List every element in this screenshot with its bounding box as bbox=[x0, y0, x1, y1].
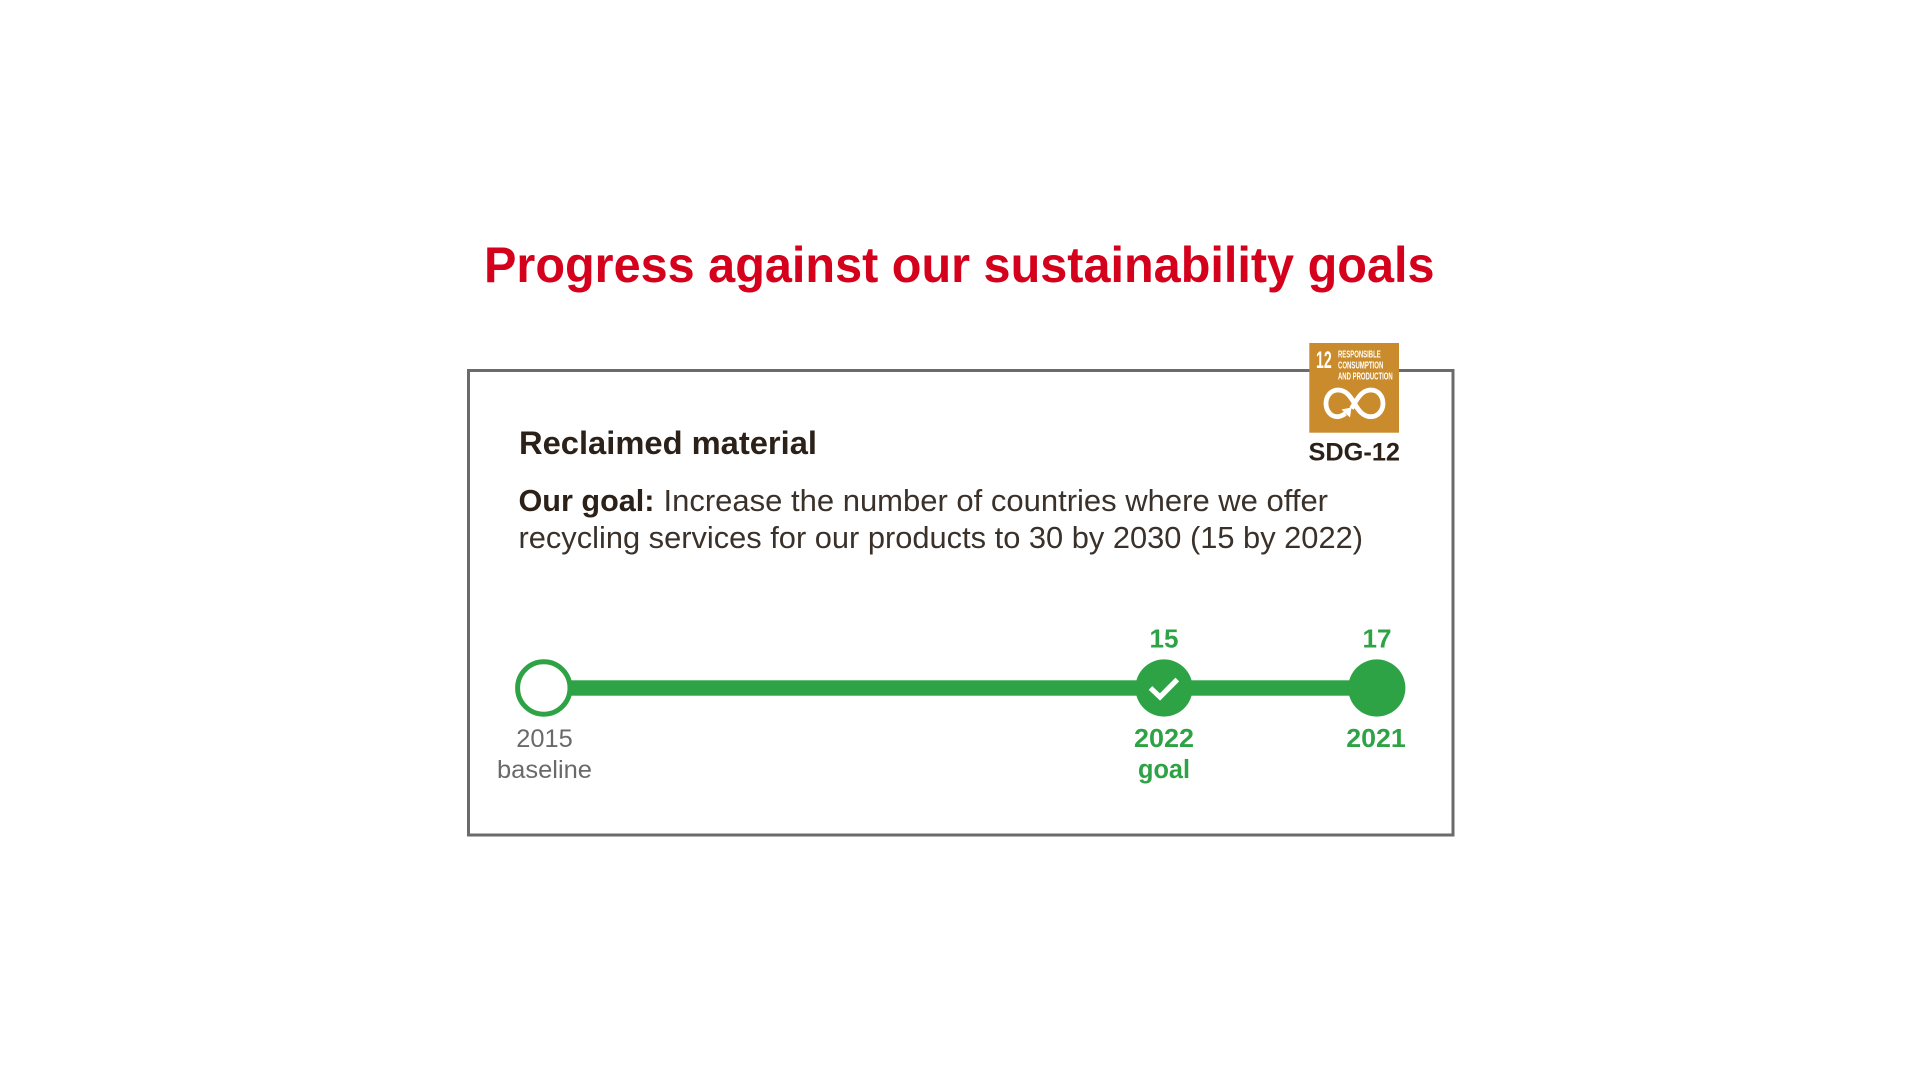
icon: SDG 12 badge: CONSUMPTION bbox=[1338, 360, 1383, 371]
value: 15: 15 bbox=[1150, 626, 1178, 654]
icon: SDG 12 badge: AND PRODUCTION bbox=[1338, 371, 1393, 382]
icon: SDG 12 badge: RESPONSIBLE bbox=[1338, 349, 1381, 360]
marker: 2021 bbox=[1348, 659, 1405, 717]
text block: goal statement: Our goal: bbox=[518, 483, 654, 518]
label: 2015 baseline: 2015 bbox=[516, 725, 573, 753]
label: 2022 goal bbox=[1134, 725, 1194, 784]
chart: progress timeline bbox=[497, 626, 1406, 784]
text block: goal statement: Increase the number of countries where we offer bbox=[664, 483, 1328, 518]
label: 2015 baseline bbox=[497, 725, 592, 784]
icon: SDG 12 badge: 12 bbox=[1316, 347, 1332, 374]
icon: SDG 12 badge bbox=[1309, 343, 1399, 433]
timeline bar bbox=[570, 680, 1360, 696]
label: 2015 baseline: baseline bbox=[497, 756, 592, 784]
label: 2022 goal: 2022 bbox=[1134, 725, 1194, 753]
title: Progress against our sustainability goals bbox=[484, 237, 1434, 293]
panel frame bbox=[468, 370, 1453, 835]
value: 17: 17 bbox=[1362, 626, 1392, 654]
label: 2022 goal: goal bbox=[1138, 756, 1190, 784]
text block: goal statement: recycling services for our products to 30 by 2030 (15 by 2022) bbox=[518, 520, 1363, 555]
panel: reclaimed material bbox=[468, 343, 1453, 835]
label: 2021: 2021 bbox=[1346, 725, 1406, 753]
heading: reclaimed material: Reclaimed material bbox=[519, 425, 817, 461]
label: SDG-12: SDG-12 bbox=[1308, 439, 1400, 467]
text block: goal statement bbox=[518, 483, 1363, 555]
marker: 2015 baseline bbox=[518, 662, 570, 714]
marker: 2022 goal with check bbox=[1135, 659, 1193, 717]
